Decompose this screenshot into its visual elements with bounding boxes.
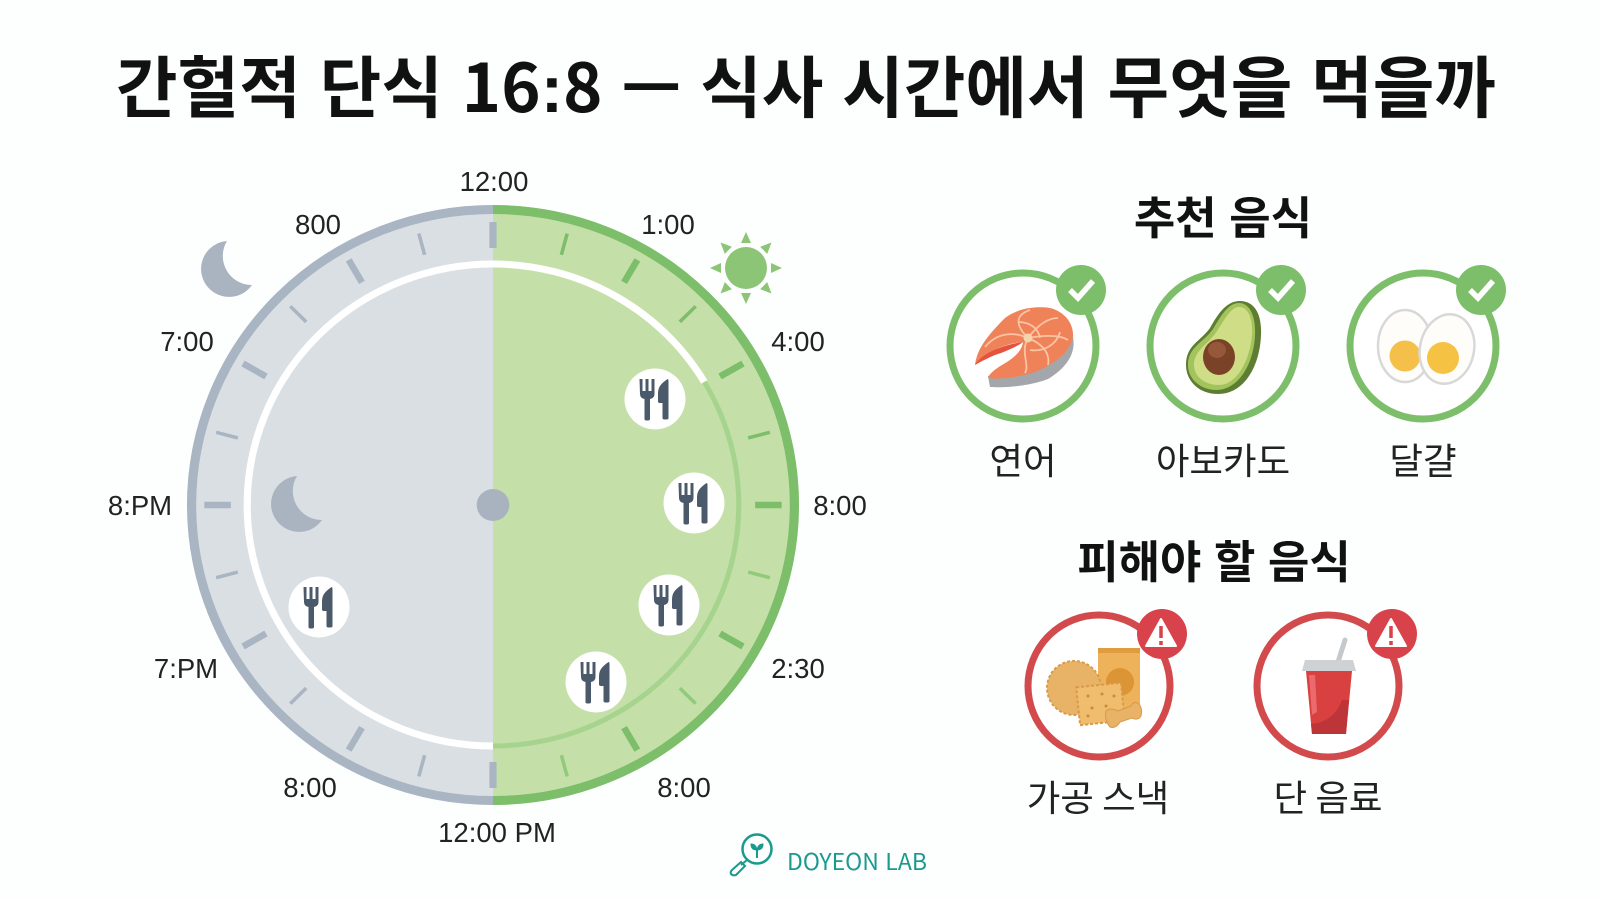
label: salmon: 연어 [989,432,1057,485]
fasting clock dial [187,205,799,805]
logo: doyeon lab [731,834,927,877]
avocado ring [1150,273,1296,419]
label 12:00: 12:00 [460,166,528,197]
warning badge [1137,609,1187,659]
icon: meal 4 [566,652,626,712]
icon: inner moon [271,476,322,532]
label: egg: 달걀 [1389,432,1457,485]
eating window inner ring [493,382,739,746]
heading: foods to avoid: 피해야 할 음식 [1077,526,1351,591]
label 1:00: 1:00 [641,209,695,240]
label 8:00 lower left: 8:00 [283,772,337,803]
label 8:00 lower right: 8:00 [657,772,711,803]
salmon ring [950,273,1096,419]
label 7:PM: 7:PM [154,653,218,684]
icon: boiled eggs [1378,309,1481,389]
panel: processed snacks [1027,609,1187,822]
label 12:00 PM: 12:00 PM [438,817,556,848]
drink ring [1257,615,1399,757]
label 8:PM: 8:PM [108,490,172,521]
icon: soda cup [1302,640,1356,734]
eating half disc [493,205,799,805]
logo text: DOYEON LAB [787,843,927,877]
panel: salmon [950,265,1106,485]
white inner ring [247,264,704,746]
centre hub [477,489,509,521]
snacks ring [1028,615,1170,757]
panel: avocado [1150,265,1306,485]
green tick marks [561,234,782,776]
eating outer ring [493,210,794,800]
icon: meal 2 [664,472,724,534]
check badge [1256,265,1306,315]
grey tick marks [204,222,493,788]
label: avocado: 아보카도 [1156,432,1290,485]
icon: salmon steak [975,307,1074,387]
icon: meal 1 [624,368,686,430]
clock labels [108,166,867,848]
fasting outer ring [192,210,493,800]
icon: snacks [1047,648,1142,727]
panel: egg [1350,265,1506,485]
icon: meal 3 [638,574,700,636]
check badge [1456,265,1506,315]
label 7:00: 7:00 [160,326,214,357]
label 2:30: 2:30 [771,653,825,684]
egg ring [1350,273,1496,419]
icon: outer moon [201,241,252,297]
label 800: 800 [295,209,341,240]
panel: sweet drinks [1257,609,1417,822]
warning badge [1367,609,1417,659]
heading: recommended foods: 추천 음식 [1134,182,1312,247]
label 8:00 right: 8:00 [813,490,867,521]
title: 간헐적 단식 16:8 — 식사 시간에서 무엇을 먹을까 [116,35,1496,132]
icon: magnifier with sprout [731,834,772,875]
label: sweet drinks: 단 음료 [1274,769,1382,822]
label: processed snacks: 가공 스낵 [1027,769,1169,822]
icon: sun [710,232,782,304]
check badge [1056,265,1106,315]
fasting half disc [187,205,493,805]
label 4:00: 4:00 [771,326,825,357]
icon: avocado [1186,301,1261,394]
icon: meal 5 fasting side [288,576,350,638]
